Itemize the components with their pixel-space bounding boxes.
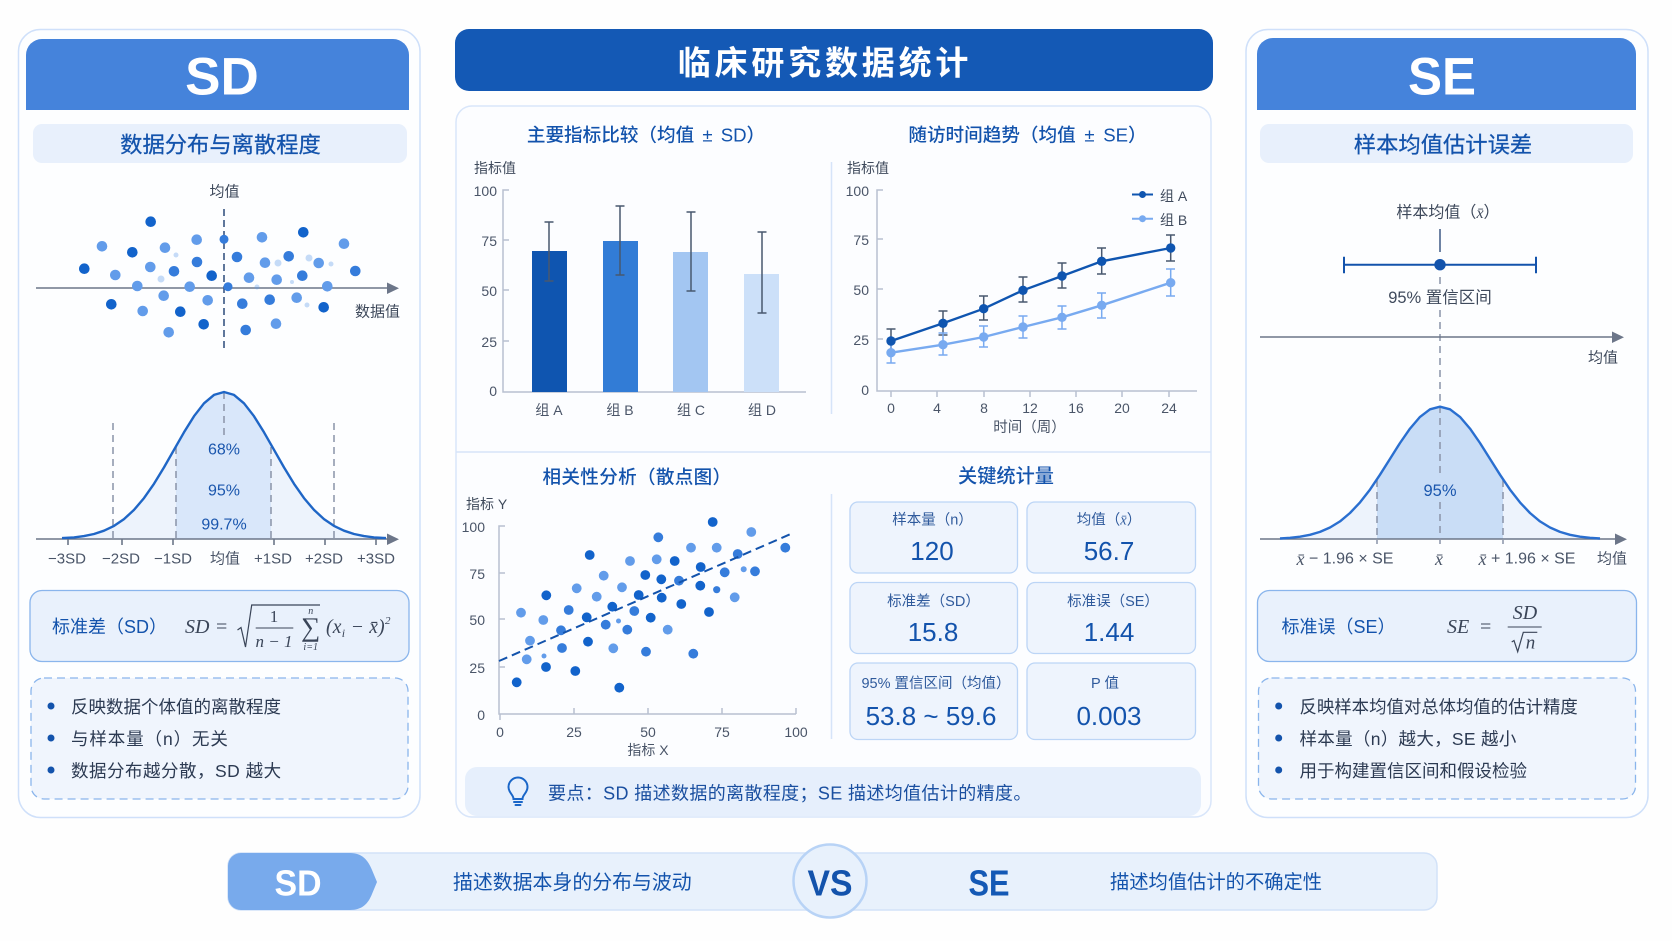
line chart: 0 [861, 382, 869, 398]
chart: normal distribution: 99.7% [201, 516, 247, 533]
chart: normal distribution: +2SD [305, 550, 343, 567]
bar chart: 100 [474, 183, 497, 199]
scatter chart: 75 [714, 724, 730, 740]
title banner: 临床研究数据统计 [678, 44, 972, 81]
bar chart: 组 A [535, 402, 563, 418]
bar chart: 25 [481, 334, 497, 350]
SD formula box: n [308, 606, 313, 617]
line chart: 12 [1022, 400, 1038, 416]
title banner [455, 29, 1213, 91]
line chart: 0 [887, 400, 895, 416]
stat card: mean: 均值（x̄） [1077, 511, 1141, 528]
comparison strip [228, 844, 1437, 918]
SE formula box: SD [1513, 602, 1538, 624]
VS badge [794, 844, 866, 918]
stat card: SE: 1.44 [1084, 617, 1134, 647]
chart: sampling distribution: x̄ [1434, 549, 1443, 569]
SE formula box: n [1526, 632, 1535, 654]
line chart: 4 [933, 400, 941, 416]
line chart: 24 [1161, 400, 1177, 416]
SD bullet list [31, 678, 408, 799]
stat card: sample size: 120 [910, 536, 954, 566]
stat card: SD: 15.8 [908, 617, 958, 647]
SD formula box: i=1 [303, 642, 318, 653]
scatter chart: 75 [469, 566, 485, 582]
scatter chart: 50 [469, 612, 485, 628]
SD formula box: 标准差（SD） [52, 617, 167, 637]
chart: sampling distribution: x̄ + 1.96 × SE [1478, 549, 1575, 569]
line chart: 组 B [1160, 212, 1187, 228]
bar chart [474, 124, 806, 418]
key statistics: 关键统计量 [958, 465, 1054, 487]
chart: data dot plot: 数据值 [355, 303, 400, 320]
chart: data dot plot [36, 183, 400, 352]
SD formula box: − x̄) [345, 617, 385, 638]
line chart: 75 [853, 232, 869, 248]
SE header [1257, 38, 1636, 110]
SD bullet list: 与样本量（n）无关 [71, 729, 229, 749]
SD description: 描述数据本身的分布与波动 [453, 871, 692, 894]
line chart: 16 [1068, 400, 1084, 416]
stat card: confidence interval: 95% 置信区间（均值） [861, 675, 1011, 692]
stat card: P value [1027, 663, 1196, 740]
line chart: 20 [1114, 400, 1130, 416]
SE bullet list: 反映样本均值对总体均值的估计精度 [1300, 697, 1578, 717]
SD header [26, 39, 409, 110]
bar chart: 75 [481, 233, 497, 249]
stat card: SD: 标准差（SD） [887, 593, 980, 610]
key statistics [850, 465, 1196, 740]
SD formula box: n − 1 [256, 632, 292, 651]
stat card: confidence interval [850, 663, 1018, 740]
scatter chart: 0 [496, 724, 504, 740]
bar chart: 主要指标比较（均值 ± SD） [527, 124, 765, 145]
chart: data dot plot: 均值 [209, 183, 240, 200]
chart: confidence interval [1260, 203, 1624, 406]
SE formula box [1258, 590, 1636, 662]
scatter chart: 100 [784, 724, 808, 740]
SD header: SD [185, 47, 259, 106]
stat card: P value: 0.003 [1076, 701, 1142, 731]
chart: sampling distribution: 均值 [1597, 550, 1627, 567]
line chart: 100 [846, 183, 869, 199]
scatter chart: 25 [566, 724, 582, 740]
SE formula box: = [1480, 616, 1491, 638]
stat card: mean: 56.7 [1084, 536, 1134, 566]
line chart: 组 A [1160, 188, 1188, 204]
SD subtitle [33, 124, 407, 163]
line chart: 50 [853, 282, 869, 298]
SE bullet list: 用于构建置信区间和假设检验 [1300, 761, 1527, 781]
line chart: 随访时间趋势（均值 ± SE） [908, 124, 1147, 145]
chart: normal distribution: 68% [208, 441, 240, 458]
SD formula box: 1 [270, 607, 278, 626]
SD subtitle: 数据分布与离散程度 [120, 132, 321, 157]
SD formula box: 2 [385, 615, 391, 627]
bar chart: 组 D [748, 402, 776, 418]
chart: normal distribution: 均值 [210, 550, 240, 567]
SD formula box: (x [326, 617, 342, 638]
SD bullet list: 反映数据个体值的离散程度 [71, 697, 281, 717]
stat card: P value: P 值 [1091, 675, 1119, 692]
line chart: 时间（周） [993, 419, 1066, 436]
SD chip: SD [274, 862, 322, 903]
line chart: 8 [980, 400, 988, 416]
chart: normal distribution: −3SD [48, 550, 86, 567]
takeaway bar: 要点：SD 描述数据的离散程度；SE 描述均值估计的精度。 [548, 783, 1032, 803]
scatter chart: 50 [640, 724, 656, 740]
takeaway bar [465, 767, 1201, 816]
stat card: sample size [850, 502, 1018, 573]
chart: confidence interval: 均值 [1588, 349, 1618, 366]
SD formula box: ∑ [301, 612, 320, 642]
SD chip [228, 853, 377, 910]
SE subtitle: 样本均值估计误差 [1354, 132, 1532, 157]
chart: sampling distribution: 95% [1423, 482, 1457, 500]
bar chart: 0 [489, 383, 497, 399]
scatter chart: 25 [469, 660, 485, 676]
SD formula box: SD [185, 616, 210, 638]
stat card: sample size: 样本量（n） [892, 511, 973, 528]
scatter chart [462, 466, 808, 758]
stat card: SE [1027, 582, 1196, 654]
scatter chart: 指标 X [627, 742, 669, 758]
line chart: 指标值 [847, 160, 889, 176]
chart: normal distribution: +1SD [254, 550, 292, 567]
stat card: SD [850, 582, 1018, 654]
SD bullet list: 数据分布越分散，SD 越大 [71, 761, 282, 781]
bar chart: 50 [481, 283, 497, 299]
SE formula box: SE [1447, 616, 1469, 638]
scatter chart: 相关性分析（散点图） [543, 466, 731, 487]
bar chart: 组 B [606, 402, 634, 418]
stat card: confidence interval: 53.8 ~ 59.6 [866, 701, 996, 731]
SE bullet list [1258, 678, 1636, 799]
chart: normal distribution: −1SD [154, 550, 192, 567]
SD formula box: i [342, 626, 345, 640]
chart: confidence interval: 样本均值（x̄） [1396, 203, 1500, 221]
SE bullet list: 样本量（n）越大，SE 越小 [1300, 729, 1517, 749]
SE formula box: 标准误（SE） [1282, 617, 1396, 637]
SE subtitle [1260, 124, 1633, 163]
icon: light bulb [508, 778, 528, 805]
chart: normal distribution: +3SD [357, 550, 395, 567]
chart: normal distribution: −2SD [102, 550, 140, 567]
SE description: 描述均值估计的不确定性 [1110, 871, 1322, 893]
panel: center charts [456, 106, 1211, 817]
SE label: SE [968, 862, 1010, 903]
scatter chart: 0 [477, 707, 485, 723]
line chart [846, 124, 1197, 436]
bar chart: 指标值 [474, 160, 516, 176]
panel: SD [18, 30, 420, 818]
bar chart: 组 C [677, 402, 705, 418]
chart: normal distribution [36, 392, 399, 567]
chart: sampling distribution [1260, 406, 1627, 569]
chart: confidence interval: 95% 置信区间 [1388, 288, 1492, 307]
VS badge: VS [808, 862, 852, 903]
chart: normal distribution: 95% [208, 482, 240, 499]
scatter chart: 指标 Y [466, 496, 508, 512]
SE header: SE [1408, 47, 1476, 106]
stat card: mean [1027, 502, 1196, 573]
stat card: SE: 标准误（SE） [1067, 593, 1159, 610]
scatter chart: 100 [462, 519, 485, 535]
chart: sampling distribution: x̄ − 1.96 × SE [1296, 549, 1393, 569]
SD formula box: = [216, 616, 227, 638]
line chart: 25 [853, 332, 869, 348]
SD formula box [30, 590, 409, 662]
panel: SE [1246, 30, 1648, 818]
